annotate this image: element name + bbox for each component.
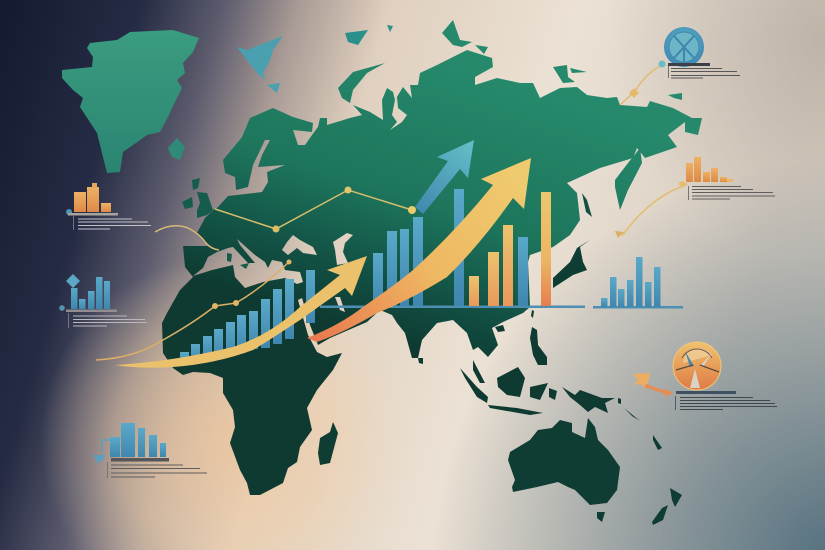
map: Sakhalin (615, 148, 642, 210)
map: Afro-Eurasia (162, 50, 702, 495)
map: Japan (553, 240, 590, 288)
map: Tasmania (597, 512, 605, 522)
map: New Zealand (652, 488, 682, 525)
map: Australia (508, 418, 620, 505)
icon: orange gauge (673, 342, 736, 394)
map: Madagascar (318, 422, 338, 465)
connector curve: Iberia (155, 226, 219, 250)
arrow: orange callout, right lower (632, 373, 673, 397)
icon: globe dial, top right (664, 27, 710, 67)
bar chart: rising blue bars over Africa (180, 270, 315, 364)
text block: right lower (675, 396, 777, 410)
map: New Guinea and Pacific isles (562, 387, 662, 450)
bar chart: central blue bars (373, 189, 528, 306)
map: Arctic islands (338, 20, 682, 103)
world map (62, 20, 702, 525)
text block: left middle (68, 313, 147, 328)
icon group: blue bars, left (59, 274, 117, 312)
map: Iceland (168, 138, 185, 160)
arrow: blue up (415, 140, 474, 214)
trend line: upper (215, 186, 416, 232)
connector: top right (620, 60, 666, 105)
trend line: lower (96, 260, 292, 360)
bar chart: central orange bars (469, 192, 551, 306)
map: Britain and Ireland (182, 178, 213, 218)
main axis line (320, 306, 683, 308)
map: Mediterranean islands (227, 253, 249, 269)
map: Canadian islands (237, 36, 283, 93)
text block: left top (73, 216, 151, 230)
arrow: yellow-orange large (307, 158, 531, 342)
bar chart: right blue bars (601, 257, 660, 307)
icon group: blue stacks, lower left (93, 423, 169, 464)
map: Honshu north isle (582, 193, 592, 217)
text block: top right (668, 66, 740, 78)
connector: right middle (615, 181, 688, 238)
map: Sri Lanka, Hainan, Taiwan, Philippines (418, 310, 547, 365)
arrow: yellow small (115, 256, 367, 368)
text block: lower left (107, 462, 207, 478)
icon group: orange bars, right (686, 157, 733, 182)
map: Greenland (62, 30, 199, 173)
icon group: coin stacks, left (66, 183, 118, 216)
map: Indonesia (460, 360, 557, 415)
text block: right middle (688, 186, 775, 200)
